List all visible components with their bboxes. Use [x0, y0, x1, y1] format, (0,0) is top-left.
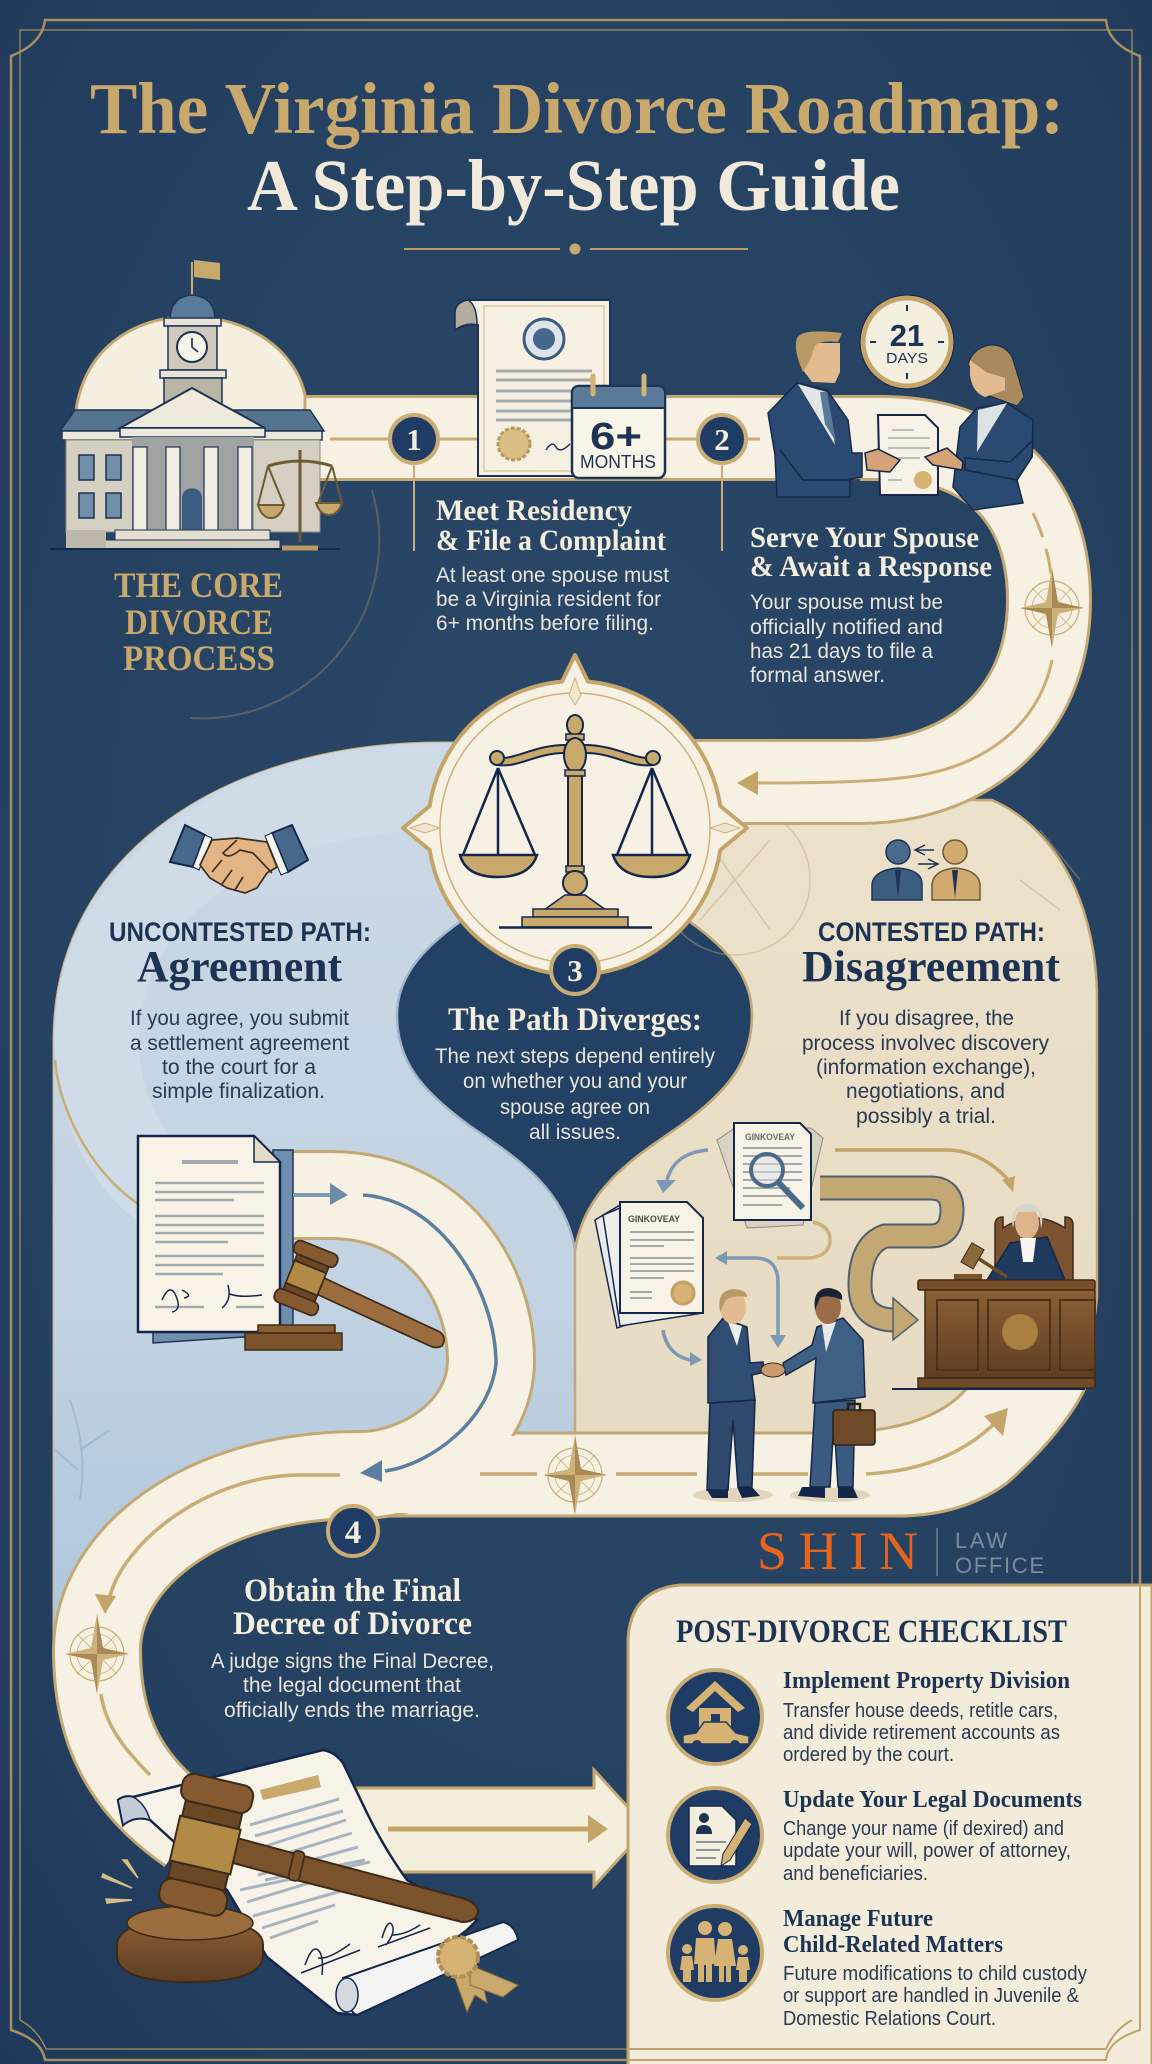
step number 4: 4 [345, 1515, 361, 1551]
road arrow: contested [984, 1408, 1008, 1436]
text: contested path: process involvec discovery [802, 1032, 1049, 1055]
text: step 2: Serve Your Spouse [750, 521, 979, 554]
gavel base [117, 1920, 263, 1982]
text: child-related matters: Domestic Relations Court. [783, 2008, 996, 2030]
text: uncontested path: simple finalization. [152, 1080, 325, 1103]
step number 1: 1 [406, 422, 422, 457]
gavel [245, 1239, 444, 1350]
logo: Shin Law Office: OFFICE [955, 1553, 1044, 1578]
road junction blend [382, 1436, 640, 1513]
text: contested path: CONTESTED PATH: [818, 917, 1045, 947]
step number 3 [551, 946, 599, 994]
logo: Shin Law Office [757, 1521, 1044, 1581]
text: path diverges: all issues. [529, 1121, 621, 1144]
road: step 1 to scales [300, 438, 1052, 783]
step number 2 [698, 415, 746, 551]
illustration: two lawyers shaking hands [693, 1288, 875, 1502]
woman [953, 345, 1033, 510]
right lawyer [783, 1288, 865, 1498]
text: contested path [802, 917, 1060, 1128]
icon: 6+ months calendar [572, 376, 665, 478]
border corner over checklist [628, 1586, 1140, 2060]
decorative arc behind core process label [190, 490, 379, 718]
icon: 21 days clock [860, 295, 954, 389]
text: step 1: be a Virginia resident for [436, 588, 661, 611]
icon: 6+ months calendar: MONTHS [580, 452, 656, 472]
arrow: gold winding path [820, 1188, 952, 1340]
illustration: settlement document with gavel [138, 1136, 444, 1350]
text: uncontested path: a settlement agreement [130, 1032, 349, 1055]
compass rose: left road [65, 1614, 129, 1694]
road center lines [101, 1195, 1000, 1775]
icon: 21 days clock: 21 [890, 318, 924, 353]
text: contested path: If you disagree, the [839, 1007, 1014, 1030]
text: uncontested path: If you agree, you submit [130, 1007, 349, 1030]
text: step 4: Decree of Divorce [233, 1606, 472, 1642]
illustration: judge at bench [892, 1204, 1095, 1389]
icon: 6+ months calendar: 6+ [590, 416, 642, 458]
text: implement property division: ordered by the court. [783, 1744, 954, 1766]
hands [865, 440, 1033, 480]
text: contested path: negotiations, and [846, 1080, 1005, 1103]
gold arrow on left road [95, 1594, 116, 1614]
illustration: discovery documents [595, 1123, 823, 1328]
icon: family [668, 1906, 762, 2000]
text: child-related matters: Child-Related Matters [783, 1932, 1003, 1958]
text: step 2: has 21 days to file a [750, 640, 933, 663]
text: uncontested path: to the court for a [162, 1056, 316, 1079]
icon: handshake [170, 825, 308, 893]
text: implement property division: and divide retirement accounts as [783, 1722, 1060, 1744]
text: step 1: & File a Complaint [436, 524, 666, 557]
heading: the core divorce process [114, 565, 283, 678]
icon: 21 days clock: DAYS [886, 350, 928, 367]
text: path diverges: The Path Diverges: [448, 1002, 702, 1038]
heading: checklist: POST-DIVORCE CHECKLIST [676, 1614, 1067, 1650]
gavel handle [222, 1834, 478, 1922]
step number 1 [390, 415, 438, 551]
text: update legal documents: Change your name (if dexired) and [783, 1818, 1064, 1840]
road: contested band to bottom [382, 1388, 1085, 1516]
icon: complaint document [455, 300, 610, 476]
text: path diverges: on whether you and your [463, 1070, 687, 1093]
text: step 2: Your spouse must be [750, 591, 943, 614]
faint tree sketch on uncontested panel [55, 1400, 110, 1500]
illustration: discovery documents: GINKOVEAY [745, 1132, 795, 1142]
icon: house and car [668, 1670, 762, 1764]
text: path diverges: spouse agree on [500, 1096, 650, 1119]
left lawyer [707, 1289, 765, 1498]
text: step 1 [436, 494, 669, 635]
road: uncontested band to decree [97, 1195, 491, 1830]
heading: the core divorce process: DIVORCE [125, 602, 273, 642]
illustration: final decree and gavel [102, 1750, 518, 2015]
blue arrow on uncontested road [360, 1460, 382, 1482]
arrow: blue right arrow [293, 1183, 348, 1205]
icon: two people exchange [872, 840, 980, 900]
text: uncontested path: UNCONTESTED PATH: [109, 917, 371, 947]
text: contested path: (information exchange), [816, 1056, 1036, 1079]
text: step 4 [211, 1573, 494, 1722]
text: step 1: Meet Residency [436, 494, 632, 527]
panel: contested path background [575, 800, 1097, 1516]
text: child-related matters: Future modifications to child custody [783, 1963, 1087, 1985]
text: implement property division [783, 1668, 1070, 1766]
text: step 4: officially ends the marriage. [224, 1699, 480, 1722]
arrow on road [737, 771, 758, 795]
arrowheads: discovery flow [656, 1176, 1015, 1366]
title: The Virginia Divorce Roadmap: [90, 68, 1064, 149]
panel: post-divorce checklist [628, 1585, 1152, 2064]
text: step 2 [750, 521, 992, 687]
gavel head [155, 1772, 255, 1918]
illustration: discovery documents: GINKOVEAY [628, 1214, 680, 1224]
text: child-related matters: or support are handled in Juvenile & [783, 1985, 1080, 2007]
text: step 4: Obtain the Final [244, 1573, 461, 1609]
step number 2: 2 [714, 422, 730, 457]
text: step 1: 6+ months before filing. [436, 612, 654, 635]
man [768, 331, 862, 497]
heading: the core divorce process: THE CORE [114, 565, 283, 605]
text: child-related matters [783, 1906, 1087, 2030]
uncontested soft band [55, 788, 440, 1205]
logo: Shin Law Office: SHIN [757, 1521, 918, 1581]
heading: the core divorce process: PROCESS [123, 638, 275, 678]
text: step 4: A judge signs the Final Decree, [211, 1650, 494, 1673]
icon: courthouse [50, 260, 340, 549]
text: child-related matters: Manage Future [783, 1906, 933, 1932]
faint compass sketch on contested panel [660, 805, 1080, 955]
text: contested path: Disagreement [802, 942, 1060, 991]
step number 4 [328, 1506, 378, 1556]
text: update legal documents: update your will, power of attorney, [783, 1840, 1071, 1862]
text: step 4: the legal document that [243, 1674, 461, 1697]
decree paper [118, 1750, 477, 2015]
text: path diverges [435, 1002, 715, 1144]
panel: uncontested path background [53, 742, 575, 1650]
text: implement property division: Implement Property Division [783, 1668, 1070, 1694]
arrows: discovery flow [663, 1150, 1010, 1360]
compass rose: road right [1020, 568, 1084, 648]
compass rose: bottom band [543, 1435, 607, 1515]
icon: document and pen [668, 1788, 762, 1882]
logo: Shin Law Office: LAW [955, 1528, 1007, 1553]
icon: small scales [258, 450, 342, 548]
served document [878, 415, 938, 495]
text: update legal documents [783, 1787, 1082, 1885]
text: path diverges: The next steps depend entirely [435, 1045, 715, 1068]
rolled certificate [343, 1922, 518, 2015]
text: uncontested path: Agreement [137, 942, 342, 991]
impact sparks [102, 1860, 138, 1903]
medallion: scales of justice [403, 655, 747, 975]
title: A Step-by-Step Guide [247, 145, 900, 226]
step number 3: 3 [567, 953, 583, 988]
text: step 2: officially notified and [750, 616, 943, 639]
text: update legal documents: Update Your Legal Documents [783, 1787, 1082, 1813]
illustration: serving spouse [768, 331, 1033, 510]
text: step 2: formal answer. [750, 664, 885, 687]
title [90, 68, 1064, 226]
text: update legal documents: and beneficiaries. [783, 1863, 928, 1885]
text: contested path: possibly a trial. [856, 1105, 996, 1128]
panel: path diverges teardrop [397, 915, 752, 1250]
arrow: decree to checklist [340, 1770, 647, 1886]
text: implement property division: Transfer house deeds, retitle cars, [783, 1700, 1058, 1722]
text: step 2: & Await a Response [750, 550, 992, 583]
text: step 1: At least one spouse must [436, 564, 669, 587]
title divider [404, 244, 748, 254]
text: uncontested path [109, 917, 371, 1103]
